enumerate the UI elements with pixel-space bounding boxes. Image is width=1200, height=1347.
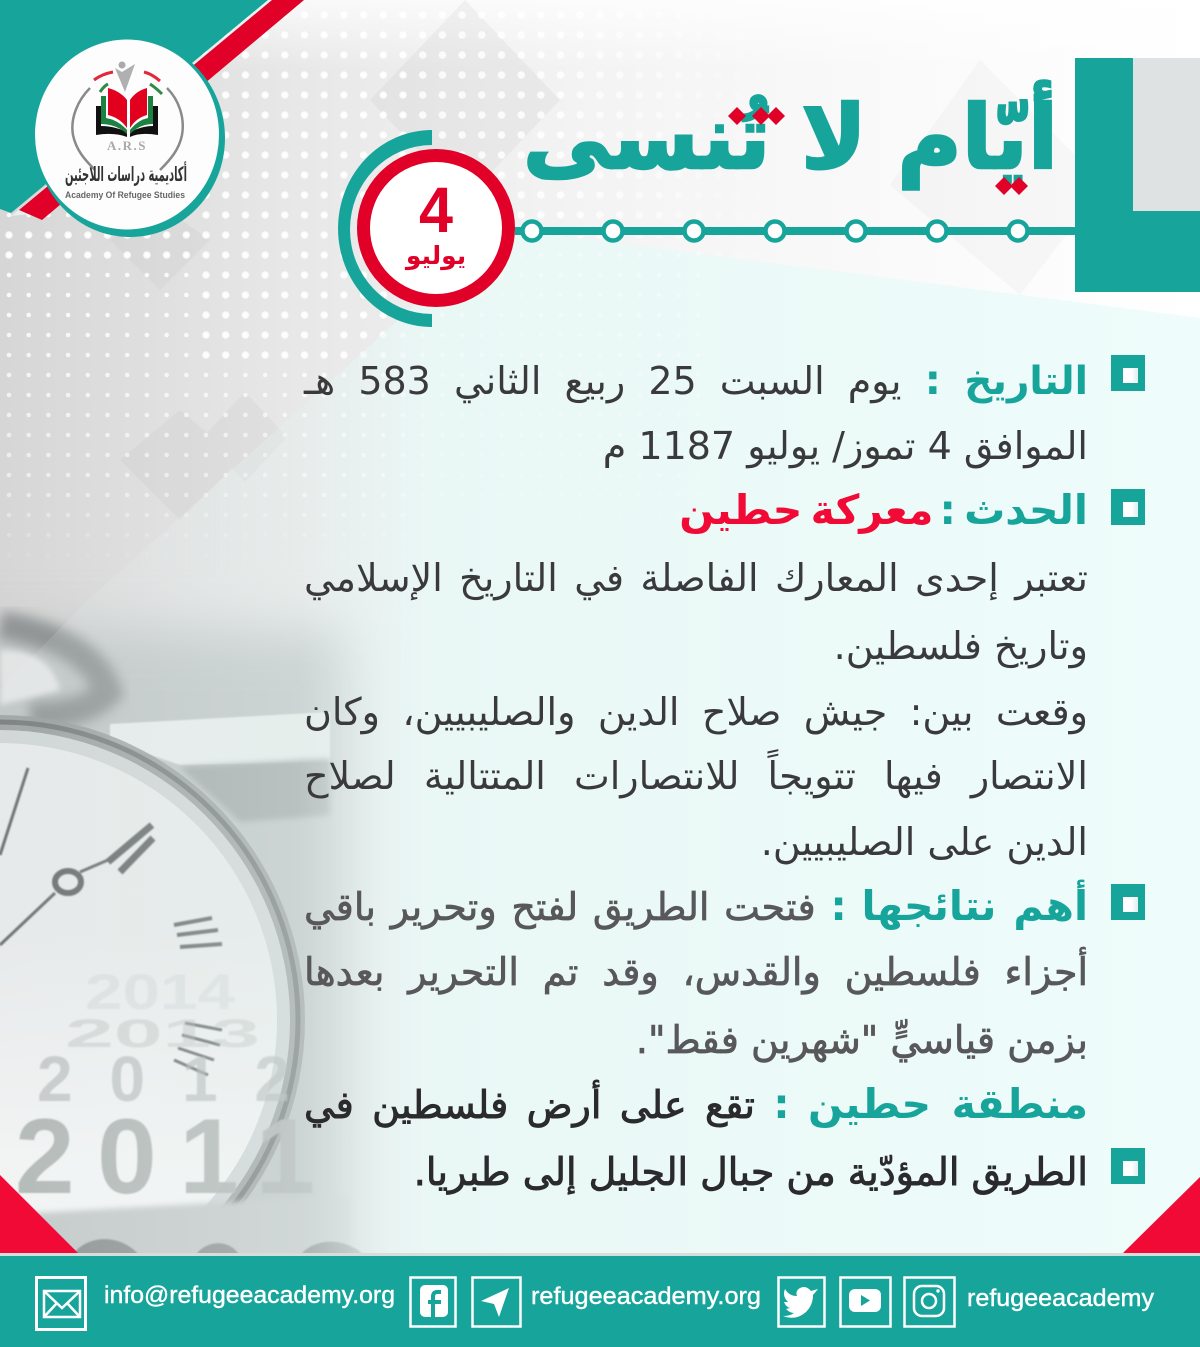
bullet: results [1111, 884, 1145, 920]
results text [304, 880, 1088, 1063]
icon: twitter [778, 1278, 824, 1326]
date line 2: الموافق 4 تموز/ يوليو 1187 م [603, 424, 1088, 468]
event body [304, 556, 1088, 864]
title red diamond dots [728, 107, 1028, 195]
results text: أهم نتائجها : فتحت الطريق لفتح وتحرير باقي [304, 882, 1088, 930]
icon: telegram [472, 1278, 520, 1326]
icon: instagram [904, 1278, 954, 1326]
date badge [338, 130, 508, 327]
event body: تعتبر إحدى المعارك الفاصلة في التاريخ الإسلامي [304, 556, 1088, 600]
results text: بزمن قياسيٍّ "شهرين فقط". [636, 1018, 1088, 1062]
event body: الانتصار فيها تتويجاً للانتصارات المتتالية لصلاح [304, 754, 1088, 798]
top-left teal corner shape [0, 0, 304, 220]
event body: وقعت بين: جيش صلاح الدين والصليبيين، وكان [304, 690, 1088, 734]
date badge: 4 [419, 174, 453, 246]
title: أيّام لا تُنسى [523, 86, 1058, 189]
logo [35, 40, 225, 237]
handle: refugeeacademy [967, 1285, 1154, 1312]
event body: الدين على الصليبيين. [761, 820, 1088, 864]
logo text: A.R.S [107, 138, 147, 153]
icon: mail [36, 1278, 86, 1330]
bullet: event [1111, 489, 1145, 525]
email: info@refugeeacademy.org [104, 1282, 395, 1309]
clock photo [0, 625, 365, 1330]
date line 1: التاريخ : يوم السبت 25 ربيع الثاني 583 هـ [304, 356, 1088, 404]
logo text [65, 138, 187, 200]
results text: أجزاء فلسطين والقدس، وقد تم التحرير بعدها [304, 950, 1088, 994]
icon: youtube [840, 1278, 890, 1326]
background years: 2011 [15, 1096, 315, 1216]
red diagonal band [19, 0, 304, 220]
background years: 2012 [37, 1043, 290, 1115]
location text [304, 1080, 1088, 1195]
bullet: location [1111, 1148, 1145, 1184]
background years: 2014 [85, 964, 235, 1020]
mint diagonal overlay [0, 228, 1200, 1256]
logo text: Academy Of Refugee Studies [65, 190, 185, 200]
icon: facebook [410, 1278, 456, 1326]
clock hands and numerals [0, 768, 222, 1075]
location text: الطريق المؤدّية من جبال الجليل إلى طبريا. [414, 1150, 1088, 1194]
timeline with nodes [515, 222, 1075, 240]
clock dial [0, 715, 305, 1325]
header block: teal and grey panel [338, 58, 1200, 327]
event body: وتاريخ فلسطين. [834, 624, 1088, 668]
background years [15, 964, 315, 1216]
location text: منطقة حطين : تقع على أرض فلسطين في [304, 1080, 1088, 1128]
bullet: date [1111, 355, 1145, 391]
event heading: الحدث : معركة حطين [679, 486, 1088, 534]
icon: open book emblem [72, 62, 183, 170]
date badge: يوليو [404, 241, 466, 271]
background years: 2013 [65, 1012, 260, 1056]
website: refugeeacademy.org [531, 1283, 761, 1310]
